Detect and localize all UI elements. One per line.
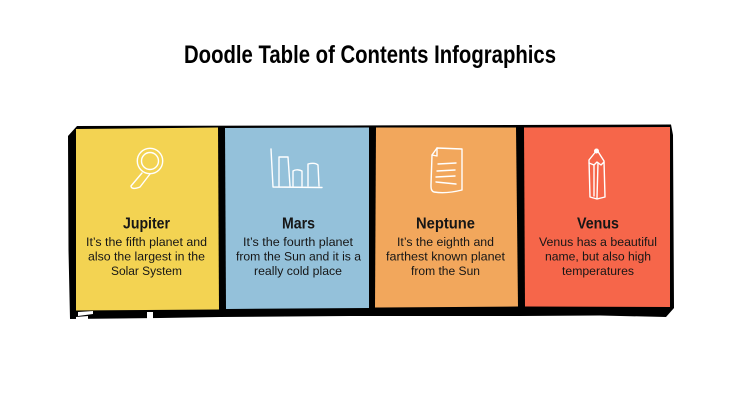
description: Mars: from the Sun and it is a [236,250,361,264]
description: Neptune [386,235,506,278]
description: Venus: name, but also high [545,250,651,264]
icon: magnifying glass [131,148,163,188]
title: Doodle Table of Contents Infographics [184,41,556,69]
icon: bar chart [271,149,322,188]
panel background [375,128,518,308]
heading: Venus: Venus [577,216,619,232]
description: Mars [236,235,361,278]
heading: Mars: Mars [282,216,315,232]
frame bottom-left gaps [76,311,153,320]
description: Jupiter: also the largest in the [88,250,205,264]
description: Venus [539,235,657,278]
panel: Venus [524,127,670,307]
panel: Mars [225,128,369,309]
heading: Neptune: Neptune [416,216,475,232]
description: Neptune: farthest known planet [386,250,506,264]
doodle frame [68,124,674,319]
description: Jupiter: It’s the fifth planet and [86,235,207,249]
panel background [225,128,369,309]
panel: Neptune [375,128,518,308]
heading: Jupiter: Jupiter [123,216,170,232]
description: Venus: temperatures [562,264,634,278]
description: Mars: really cold place [254,264,342,278]
description: Neptune: from the Sun [411,264,480,278]
panel background [76,128,219,310]
icon: document [431,148,462,193]
description: Jupiter [86,235,207,278]
icon: pencil [589,149,605,199]
table of contents frame [68,124,674,320]
description: Jupiter: Solar System [111,264,182,278]
description: Venus: Venus has a beautiful [539,235,657,249]
description: Neptune: It’s the eighth and [397,235,494,249]
description: Mars: It’s the fourth planet [243,235,354,249]
panel background [524,127,670,307]
panel: Jupiter [76,128,219,310]
